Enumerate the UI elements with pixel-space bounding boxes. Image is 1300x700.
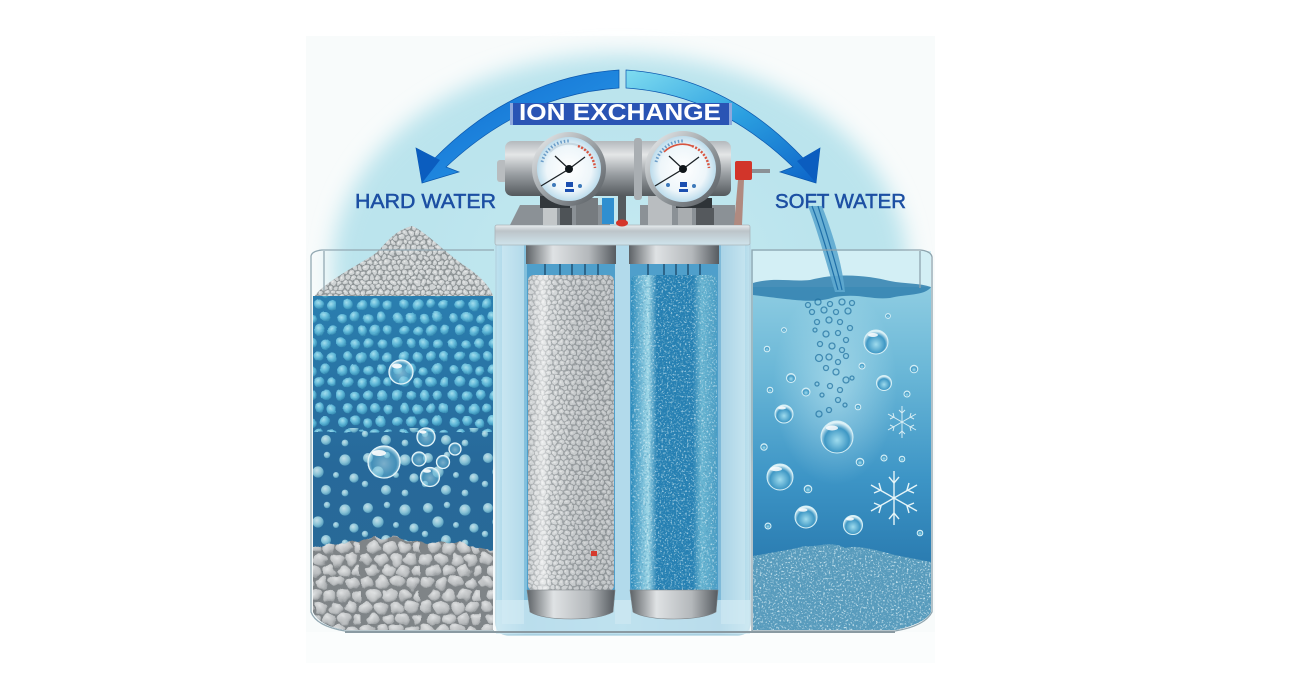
bubbles column <box>806 299 854 417</box>
title banner: ion exchange: ION EXCHANGE <box>519 99 721 125</box>
snowflake: small <box>888 406 916 438</box>
valve manifold <box>497 131 770 226</box>
left tank: hard water <box>306 224 500 640</box>
glowing dome backdrop <box>306 54 935 663</box>
centre housing <box>495 225 750 635</box>
arrow: hard water side <box>416 70 619 183</box>
gauge: right <box>645 131 721 207</box>
pouring stream <box>808 206 845 292</box>
snowflake: large <box>871 471 917 525</box>
water body <box>752 285 934 635</box>
left filter column <box>526 245 616 619</box>
clear housing body <box>496 244 750 635</box>
background panel <box>306 36 935 663</box>
gravel pile <box>314 226 493 296</box>
arrow: soft water side <box>626 70 820 183</box>
base shadow line <box>345 631 895 633</box>
right filter column <box>629 245 719 619</box>
label: hard water: HARD WATER <box>355 191 496 213</box>
gauge: left <box>532 132 606 206</box>
large bubbles <box>368 360 461 486</box>
red valve <box>734 161 770 225</box>
fittings under gauges <box>510 196 735 226</box>
water surface <box>753 275 931 301</box>
glass outline <box>752 250 932 631</box>
main pipe <box>497 138 731 200</box>
right tank: soft water <box>752 206 934 635</box>
round bubbles <box>761 314 923 536</box>
hard water body <box>313 296 493 630</box>
housing top cap <box>495 225 750 245</box>
label: soft water: SOFT WATER <box>775 191 906 213</box>
sediment <box>753 544 931 630</box>
tank air space <box>753 251 931 289</box>
glass outline <box>311 250 494 631</box>
